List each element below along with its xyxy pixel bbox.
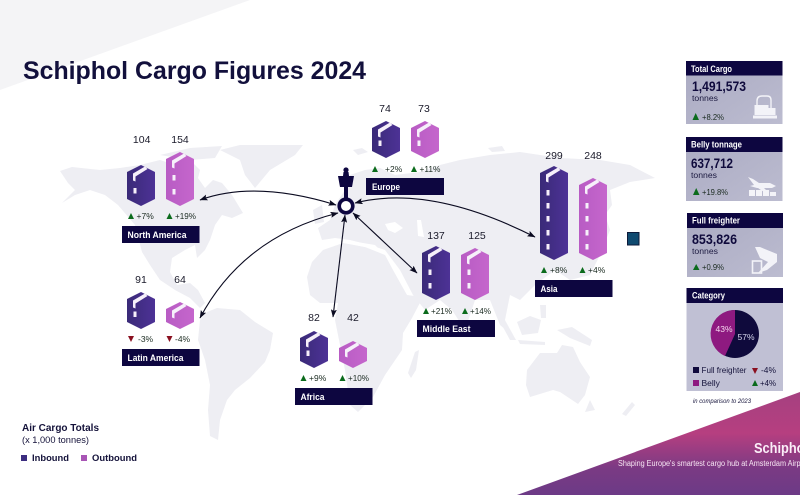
belly tonnes value: 637,712: [691, 155, 733, 171]
Southeast Asia islands and Australasia: [408, 305, 635, 416]
panel: Category: [686, 288, 783, 391]
arrow: North America: [200, 191, 336, 205]
panel: Europe: [366, 103, 444, 195]
panel: Total Cargo: [686, 61, 782, 124]
change: inbound: -3%: [138, 334, 154, 344]
unit: tonnes: [692, 93, 718, 103]
legend unit: (x 1,000 tonnes): [22, 435, 89, 446]
region label: Asia: [540, 284, 558, 295]
total tonnes value: 1,491,573: [692, 78, 746, 94]
pie chart: [711, 310, 759, 358]
change: inbound: +2%: [385, 164, 403, 174]
region label: Europe: [372, 182, 400, 193]
panel header: Full freighter: [692, 216, 740, 226]
change: inbound: +21%: [431, 306, 452, 316]
value: inbound: 91: [135, 274, 147, 286]
unit: tonnes: [692, 246, 718, 256]
value: outbound: 125: [468, 230, 486, 242]
legend: belly: +4%: [760, 378, 776, 388]
value: inbound: 299: [545, 150, 563, 162]
region label: [535, 280, 612, 297]
icon: Schiphol hub tower: [338, 167, 354, 213]
region label: Middle East: [422, 324, 471, 335]
panel: Latin America: [122, 274, 200, 366]
change: inbound: +8%: [550, 265, 568, 275]
box: outbound: [579, 178, 607, 260]
freighter tonnes value: 853,826: [692, 231, 737, 247]
Eurasia landmass: [313, 146, 655, 335]
change: outbound: -4%: [175, 334, 191, 344]
box: inbound: [127, 292, 155, 329]
banner: Schiphol footer: [517, 392, 800, 495]
pie chart: 43%: [715, 324, 733, 334]
background corner triangle: [0, 0, 250, 90]
legend: air cargo totals: [21, 423, 137, 463]
inland seas: [345, 220, 424, 250]
change: inbound: +9%: [309, 373, 327, 383]
Africa landmass: [307, 243, 423, 412]
panel header: Belly tonnage: [691, 140, 742, 150]
change: inbound: [541, 265, 568, 275]
value: outbound: 248: [584, 150, 602, 162]
change: outbound: [580, 265, 606, 275]
panel header: Category: [692, 290, 725, 300]
legend: full freighter: [693, 365, 776, 375]
box: inbound: [300, 331, 328, 368]
value: outbound: 64: [174, 274, 186, 286]
box: inbound: [540, 166, 568, 260]
change: outbound: +4%: [588, 265, 606, 275]
legend: full freighter: -4%: [761, 365, 776, 375]
flow arrows: [200, 191, 535, 318]
small teal square: [628, 232, 639, 245]
title: Schiphol Cargo Figures 2024: [23, 57, 366, 85]
value: inbound: 104: [133, 134, 151, 146]
box: outbound: [339, 341, 367, 368]
value: inbound: 74: [379, 103, 391, 115]
legend item: outbound: Outbound: [92, 453, 137, 463]
panel: Full freighter: [687, 213, 783, 277]
region label: Latin America: [128, 353, 184, 364]
legend: full freighter: Full freighter: [702, 365, 747, 375]
legend: belly: Belly: [702, 378, 721, 388]
icon: plane and cargo: [748, 177, 776, 196]
change: outbound: +14%: [470, 306, 491, 316]
panel header: Total Cargo: [691, 64, 732, 74]
Greenland and arctic islands: [160, 145, 303, 188]
note: comparison year: in comparison to 2023: [693, 399, 752, 405]
change: inbound: +7%: [136, 211, 154, 221]
panel: Africa: [295, 312, 372, 405]
North America landmass: [60, 160, 243, 308]
pie chart: 57%: [737, 332, 755, 342]
icon: freighter nose and pallet: [752, 247, 777, 273]
change: +0.9%: [702, 262, 724, 272]
value: outbound: 42: [347, 312, 359, 324]
region label: Africa: [300, 392, 325, 403]
arrow: Latin America: [200, 213, 338, 318]
panel: Belly tonnage: [686, 137, 782, 201]
box: inbound: [372, 121, 400, 158]
value: inbound: 137: [427, 230, 445, 242]
value: inbound: 82: [308, 312, 320, 324]
change: outbound: +11%: [420, 164, 441, 174]
box: outbound: [166, 302, 194, 329]
South America landmass: [198, 308, 273, 440]
arrow: Africa: [333, 215, 345, 317]
change: +19.8%: [702, 187, 728, 197]
value: outbound: 73: [418, 103, 430, 115]
box: inbound: [422, 246, 450, 300]
change: +8.2%: [702, 112, 724, 122]
legend: belly: [693, 378, 776, 388]
panel: Middle East: [417, 230, 495, 337]
region label: North America: [128, 230, 187, 241]
panel: Asia: [535, 150, 612, 297]
change: outbound: +19%: [175, 211, 196, 221]
world map: [60, 145, 655, 440]
legend item: inbound: Inbound: [32, 453, 69, 463]
arrow: Middle East: [353, 213, 417, 273]
icon: cargo loader: [753, 96, 777, 118]
box: outbound: [411, 121, 439, 158]
box: outbound: [166, 152, 194, 206]
box: outbound: [461, 248, 489, 300]
value: outbound: 154: [171, 134, 189, 146]
change: outbound: +10%: [348, 373, 369, 383]
box: inbound: [127, 165, 155, 206]
legend title: Air Cargo Totals: [22, 423, 99, 434]
arrow: Asia: [355, 198, 535, 237]
unit: tonnes: [691, 170, 717, 180]
panel: North America: [122, 134, 200, 243]
